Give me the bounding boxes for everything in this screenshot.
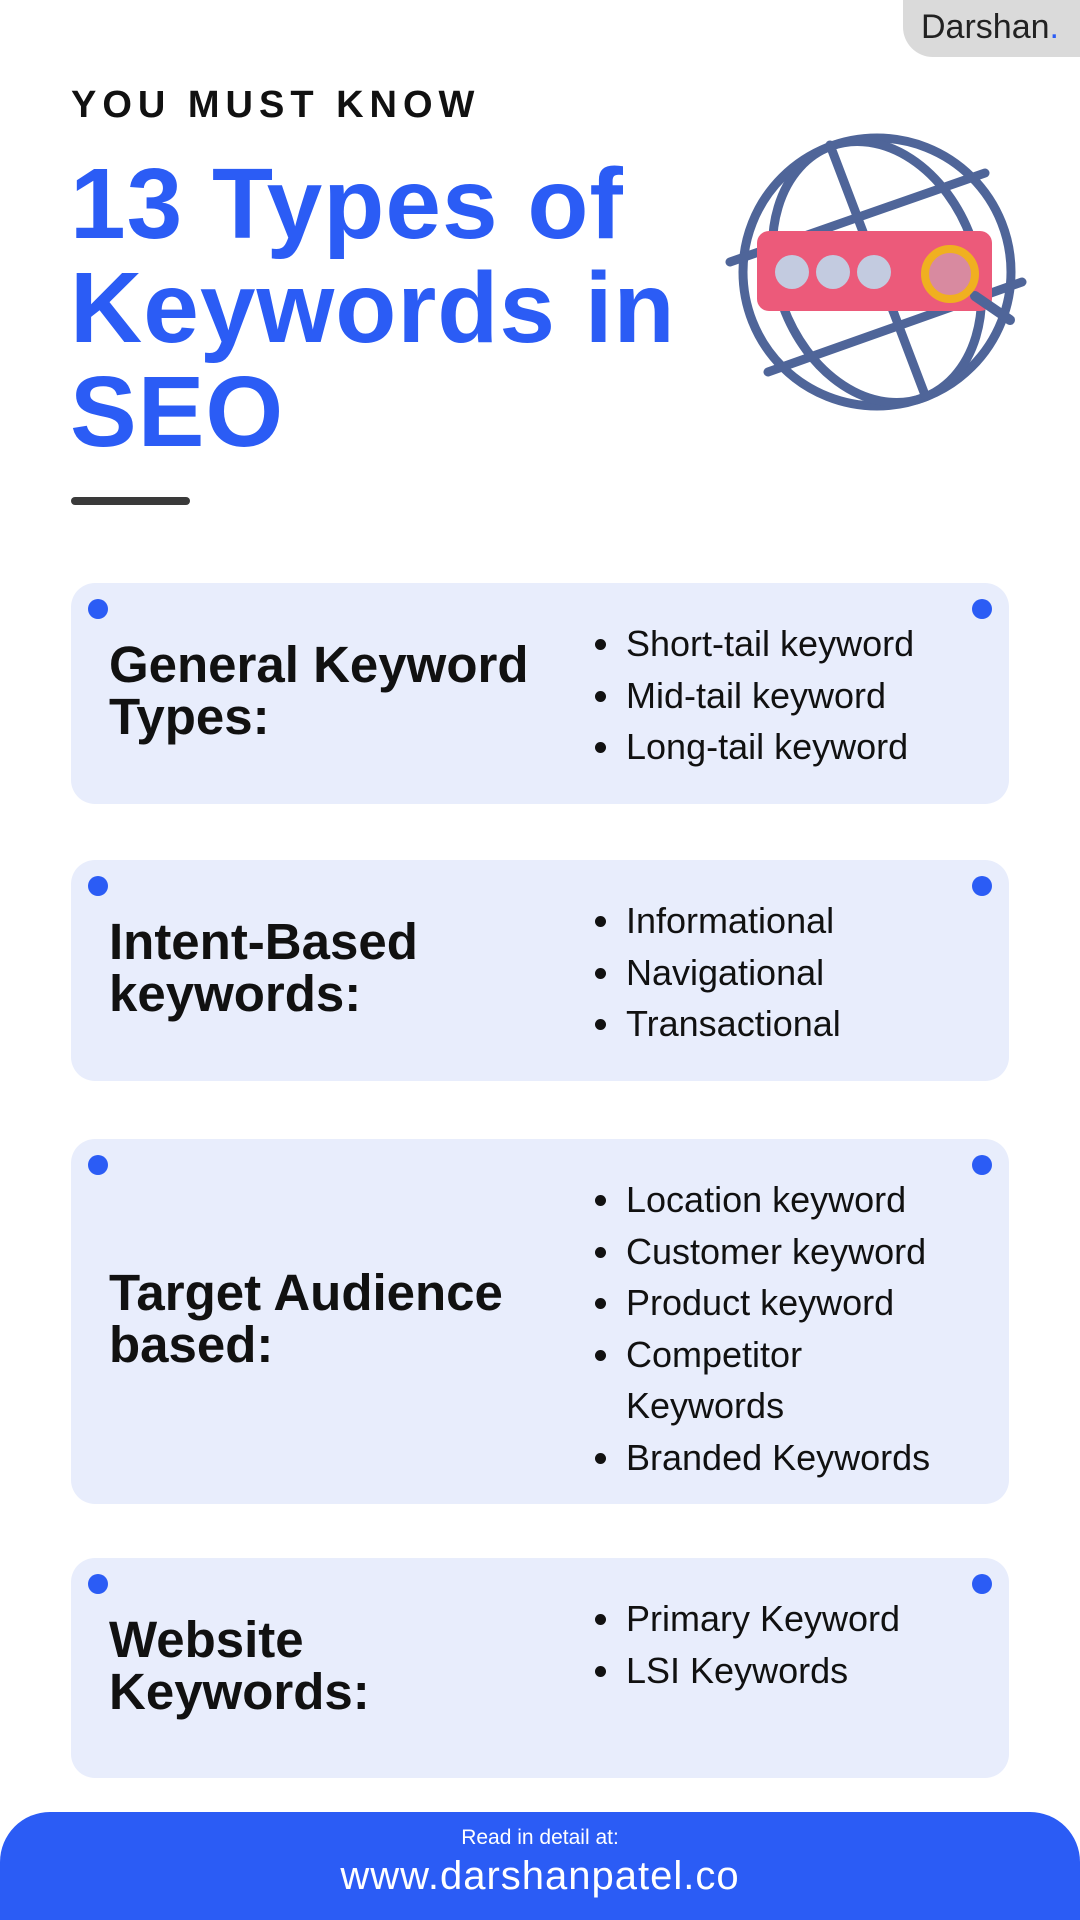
list: audience [595,1179,930,1478]
list: audience: Location keyword [626,1179,906,1220]
heading: website: Keywords: [109,1663,370,1720]
title [70,148,676,468]
footer: www.darshanpatel.co [340,1854,740,1898]
heading: website [109,1611,370,1720]
heading: website: Website [109,1611,304,1668]
heading: audience: Target Audience [109,1264,503,1321]
list: intent: Transactional [626,1003,841,1044]
list: general: Long-tail keyword [626,726,908,767]
list: general: Short-tail keyword [626,623,914,664]
title: SEO [70,356,284,468]
list: audience: Customer keyword [626,1230,926,1272]
panel: intent-based [71,860,1009,1081]
footer: Read in detail at: [461,1826,619,1849]
heading: general: Types: [109,688,270,745]
list: audience: Product keyword [626,1282,894,1323]
icon: globe with search bar [726,134,1026,410]
list: website: Primary Keyword [626,1598,900,1639]
subtitle: YOU MUST KNOW [71,84,480,126]
list: general [595,623,914,767]
heading: audience: based: [109,1316,273,1373]
heading: audience [109,1264,503,1373]
list: intent: Informational [626,900,834,941]
heading: intent: Intent-Based [109,913,418,970]
panel: general keyword types [71,583,1009,804]
list: website [595,1598,900,1690]
list: general: Mid-tail keyword [626,674,886,716]
footer [0,1812,1080,1920]
list: website: LSI Keywords [626,1650,848,1690]
title: 13 Types of [70,148,624,260]
list: audience: Keywords [626,1385,784,1426]
list: audience: Branded Keywords [626,1436,930,1478]
logo tab [903,0,1080,57]
logo tab: Darshan. [921,8,1059,46]
heading: general [109,636,528,745]
heading: intent: keywords: [109,965,361,1022]
heading: intent [109,913,418,1022]
list: intent [595,900,841,1044]
panel: target audience [71,1139,1009,1504]
list: intent: Navigational [626,952,824,992]
title: Keywords in [70,252,676,364]
underline [71,497,190,505]
list: audience: Competitor [626,1334,802,1374]
panel: website keywords [71,1558,1009,1778]
heading: general: General Keyword [109,636,528,693]
